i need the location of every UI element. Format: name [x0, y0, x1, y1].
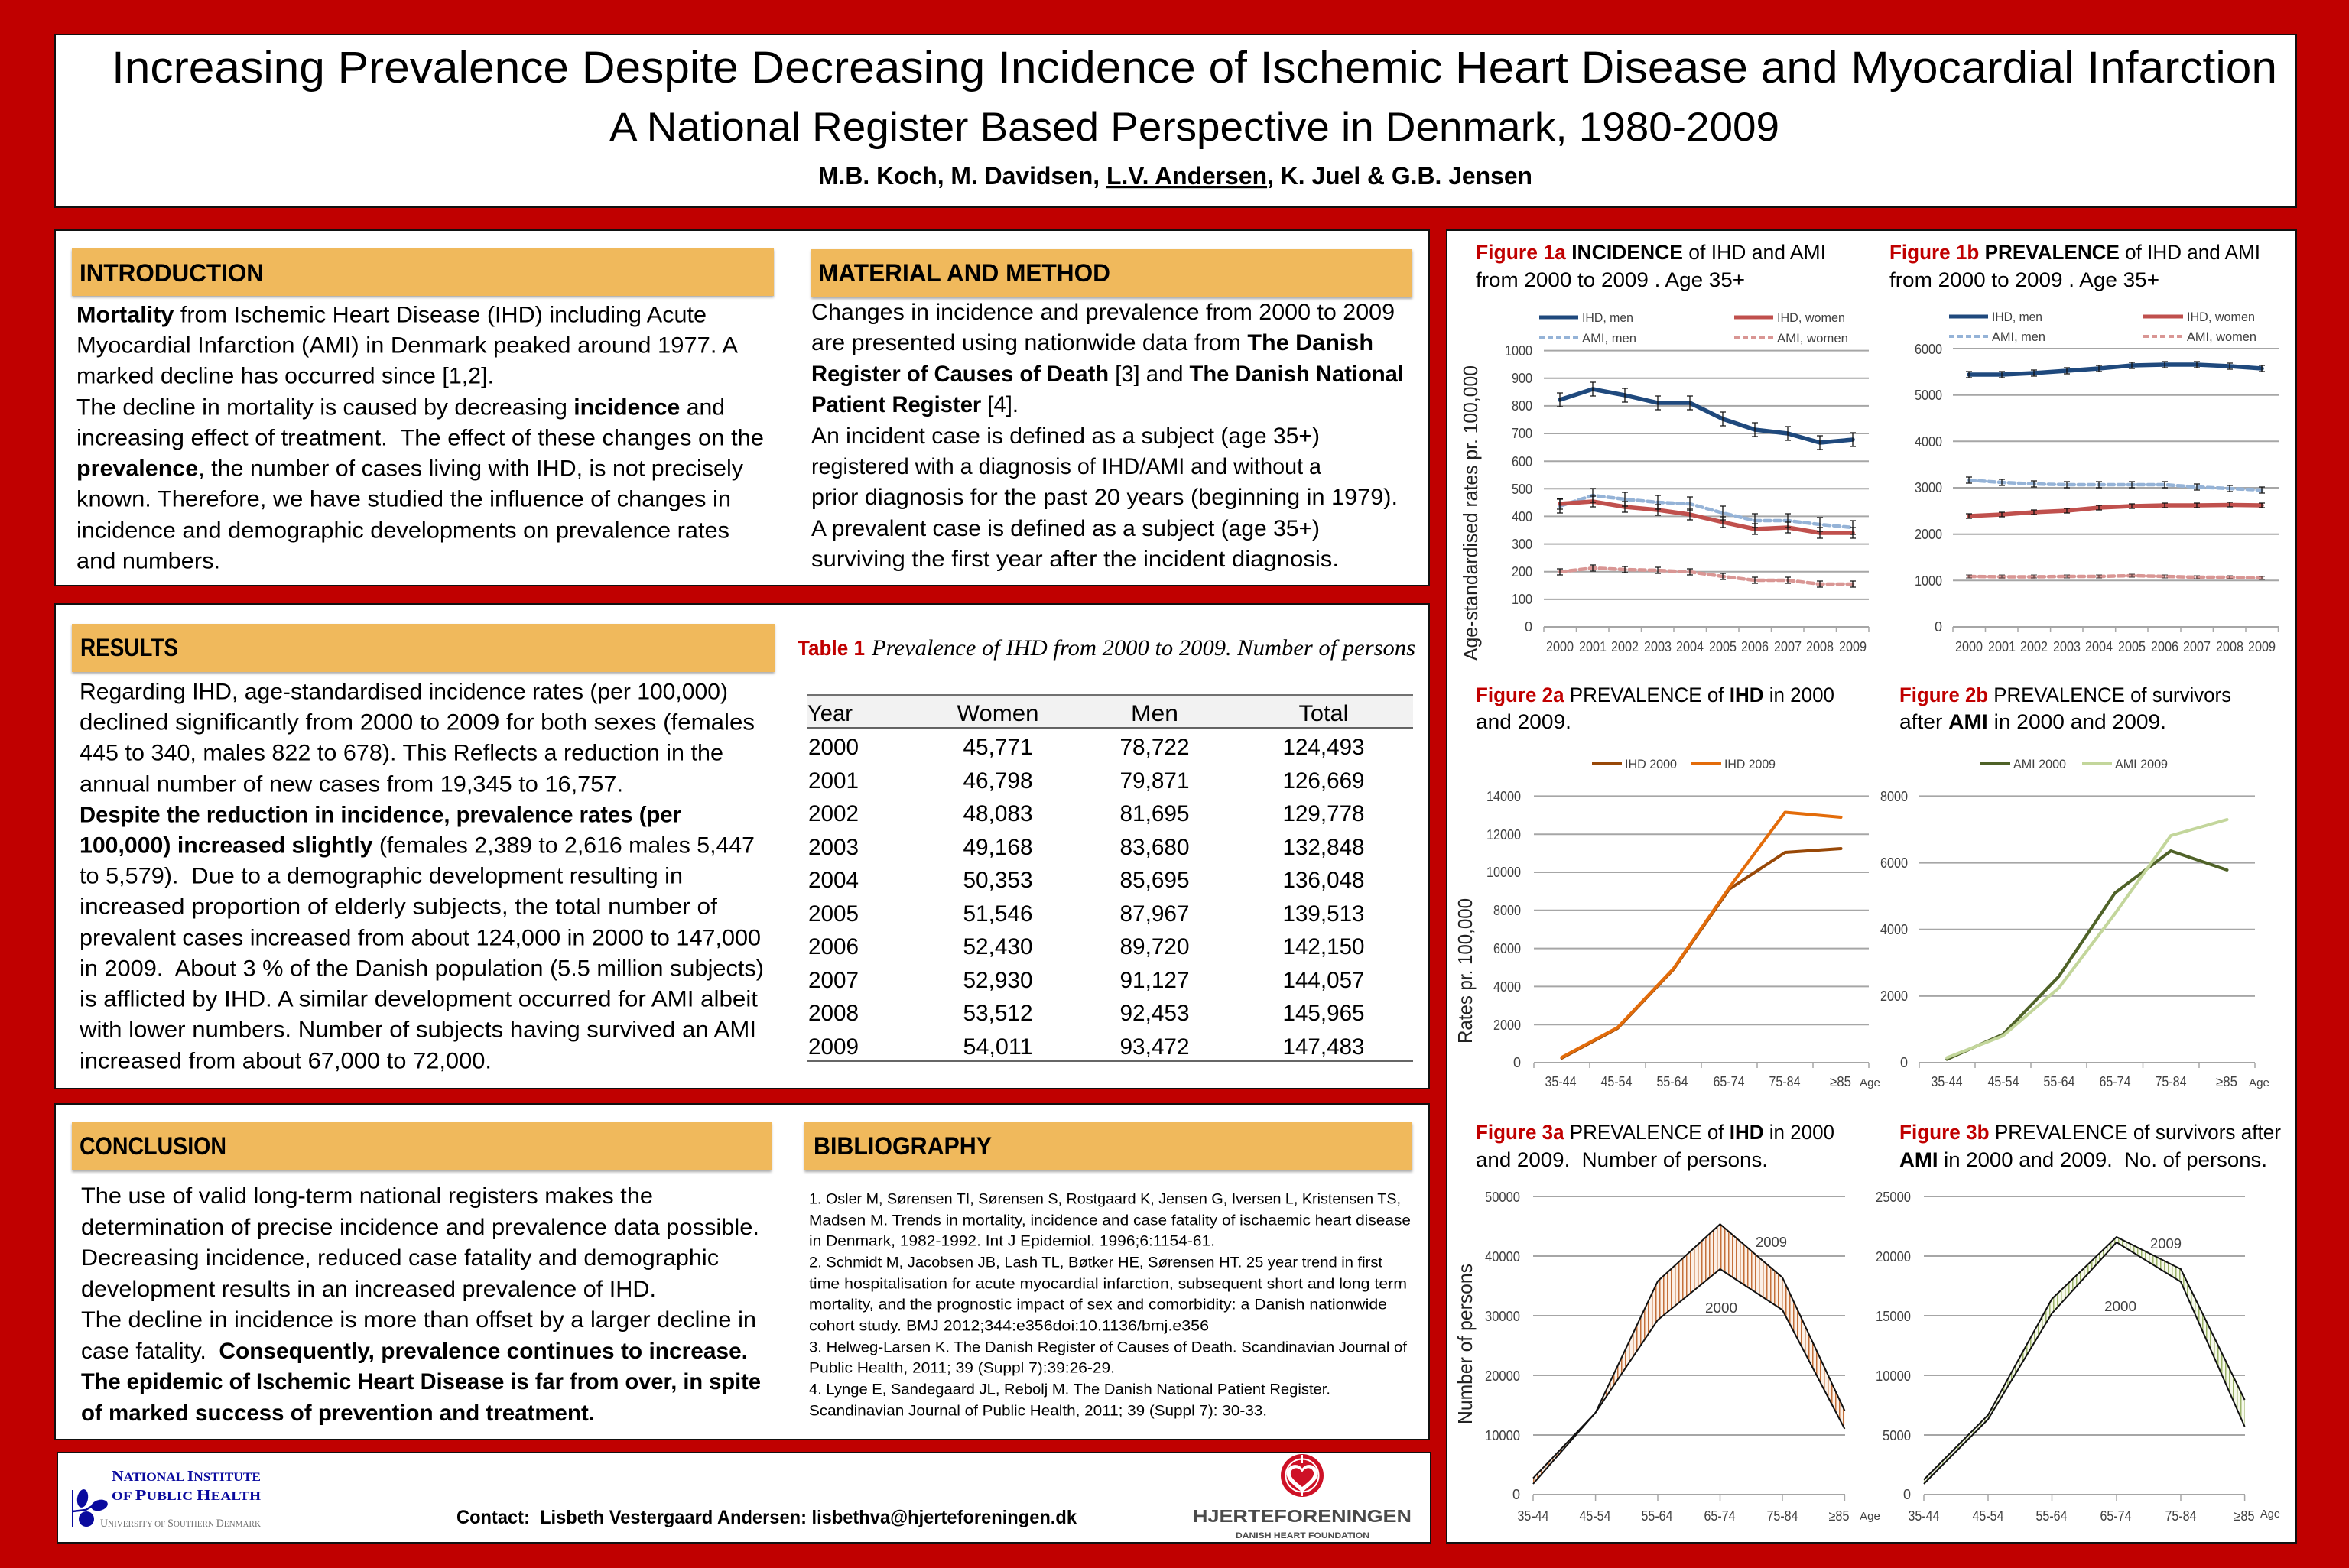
table: prevalence numbers: 53,512	[963, 1001, 1032, 1026]
chart: figure 2a prevalence by age: 4000	[1493, 979, 1521, 995]
table: prevalence numbers: 2000	[808, 735, 859, 760]
table: prevalence numbers: 2007	[808, 968, 859, 993]
chart: figure 1a incidence line chart: 2003	[1644, 639, 1672, 654]
chart: figure 1a incidence line chart: 900	[1512, 371, 1532, 386]
text block: material and method: An incident case is defined as a subject (age 35+)	[811, 424, 1320, 449]
text block: results: increased from about 67,000 to 72,000.	[80, 1049, 492, 1073]
text block: introduction: prevalence, the number of cases living with IHD, is not precisely	[76, 456, 743, 482]
chart: figure 1b prevalence line chart: 2001	[1988, 639, 2016, 654]
text block: introduction: marked decline has occurred since [1,2].	[76, 364, 494, 388]
chart: figure 3a number of persons band: 20000	[1485, 1368, 1520, 1384]
text block: results: with lower numbers. Number of subjects having survived an AMI	[79, 1017, 756, 1043]
text block: material and method: A prevalent case is defined as a subject (age 35+)	[811, 516, 1320, 541]
legend 2b: AMI 2009	[2115, 757, 2168, 771]
chart: figure 3a number of persons band: 40000	[1485, 1249, 1520, 1264]
chart: figure 3b number of survivors band: Age	[2260, 1508, 2280, 1521]
text block: conclusion: determination of precise incidence and prevalence data possible.	[81, 1215, 759, 1240]
chart: figure 3a number of persons band: 75-84	[1766, 1508, 1798, 1524]
chart: figure 1b prevalence line chart: 2000	[1955, 639, 1983, 654]
chart: figure 3b number of survivors band: ≥85	[2234, 1508, 2254, 1524]
chart: figure 2a prevalence by age: 65-74	[1713, 1074, 1745, 1089]
chart: figure 1b prevalence line chart: 2008	[2216, 639, 2243, 654]
heading: material and method: MATERIAL AND METHOD	[818, 259, 1110, 287]
legend 2a: IHD 2000	[1625, 757, 1677, 771]
table: prevalence numbers: 2003	[808, 835, 859, 860]
text block: results: to 5,579). Due to a demographic development resulting in	[80, 864, 683, 888]
table: prevalence numbers: 136,048	[1283, 868, 1364, 893]
figure 1b heading: Figure 1b PREVALENCE of IHD and AMI	[1889, 241, 2260, 264]
table: prevalence numbers: 52,430	[963, 934, 1032, 959]
figure 3a heading: Figure 3a PREVALENCE of IHD in 2000	[1476, 1121, 1834, 1144]
title panel	[55, 34, 2296, 207]
table: prevalence numbers: 92,453	[1119, 1001, 1190, 1026]
heading: conclusion	[72, 1122, 772, 1170]
text block: bibliography: mortality, and the prognostic impact of sex and comorbidity: a Danish nationwide	[809, 1297, 1387, 1313]
chart: figure 1a incidence line chart: 1000	[1505, 343, 1532, 359]
figure 3b heading: Figure 3b PREVALENCE of survivors after	[1899, 1121, 2281, 1144]
chart: figure 1a incidence line chart: 2004	[1676, 639, 1704, 654]
figure 1a heading: Figure 1a INCIDENCE of IHD and AMI	[1476, 241, 1826, 264]
logo: national institute of public health: UNIVERSITY OF SOUTHERN DENMARK	[100, 1518, 261, 1530]
table: prevalence numbers: 81,695	[1119, 801, 1190, 826]
text block: results: increased proportion of elderly subjects, the total number of	[80, 894, 718, 919]
text block: conclusion: The epidemic of Ischemic Heart Disease is far from over, in spite	[81, 1369, 761, 1394]
panel: figures	[1447, 230, 2296, 1543]
text block: introduction: Mortality from Ischemic Heart Disease (IHD) including Acute	[76, 303, 707, 327]
figure 2a heading	[1476, 683, 1834, 733]
text block: results	[79, 679, 764, 1073]
chart: figure 1b prevalence line chart: 4000	[1915, 434, 1942, 450]
chart: figure 2b survivors by age: 35-44	[1932, 1074, 1962, 1089]
chart: figure 2b survivors by age: 45-54	[1988, 1074, 2019, 1089]
table: prevalence numbers: 129,778	[1283, 801, 1364, 826]
chart: figure 2b survivors by age: 75-84	[2155, 1074, 2187, 1089]
chart: figure 2b survivors by age: 55-64	[2043, 1074, 2075, 1089]
chart: figure 2a prevalence by age	[1486, 757, 1880, 1089]
legend 2b: AMI 2000	[2013, 757, 2066, 771]
text block: conclusion: Decreasing incidence, reduced case fatality and demographic	[81, 1245, 719, 1271]
table: prevalence numbers: 144,057	[1283, 968, 1364, 993]
table: prevalence numbers: 48,083	[963, 801, 1032, 826]
chart: figure 2b survivors by age: 2000	[1880, 989, 1908, 1004]
text block: introduction: Myocardial Infarction (AMI) in Denmark peaked around 1977. A	[76, 333, 738, 358]
chart: figure 1a incidence line chart: 700	[1512, 426, 1532, 441]
table: prevalence numbers: Women	[957, 701, 1038, 726]
panel: conclusion and bibliography	[55, 1104, 1429, 1440]
text block: conclusion: of marked success of prevention and treatment.	[81, 1401, 595, 1426]
text block: bibliography: Public Health, 2011; 39 (Suppl 7):39:26-29.	[809, 1361, 1115, 1376]
table: prevalence numbers: 2008	[808, 1001, 859, 1026]
text block: introduction: increasing effect of treatment. The effect of these changes on the	[76, 425, 764, 451]
table: prevalence numbers: 89,720	[1119, 934, 1190, 959]
text block: bibliography: in Denmark, 1982-1992. Int J Epidemiol. 1996;6:1154-61.	[809, 1234, 1215, 1249]
table: prevalence numbers: 93,472	[1119, 1034, 1190, 1060]
subtitle: A National Register Based Perspective in Denmark, 1980-2009	[609, 105, 1779, 150]
table: prevalence numbers: 46,798	[963, 768, 1032, 794]
chart: figure 3a number of persons band: ≥85	[1829, 1508, 1849, 1524]
table: prevalence numbers: 124,493	[1283, 735, 1364, 760]
table: prevalence numbers: Men	[1131, 701, 1178, 726]
logo: national institute of public health: OF PUBLIC HEALTH	[112, 1487, 262, 1504]
chart: figure 1b prevalence line chart: 0	[1935, 619, 1942, 635]
chart: figure 3b number of survivors band: 0	[1903, 1487, 1911, 1502]
legend 1a	[1539, 310, 1848, 346]
chart: figure 3b number of survivors band: 5000	[1883, 1428, 1911, 1443]
chart: figure 3b number of survivors band: 75-84	[2165, 1508, 2196, 1524]
chart: figure 1b prevalence line chart	[1915, 310, 2279, 654]
text block: material and method: Register of Causes of Death [3] and The Danish National	[811, 362, 1404, 387]
text block: material and method: are presented using nationwide data from The Danish	[811, 330, 1373, 355]
text block: results: 445 to 340, males 822 to 678). This Reflects a reduction in the	[80, 740, 723, 766]
text block: bibliography: 3. Helweg-Larsen K. The Danish Register of Causes of Death. Scandinavian Journal of	[809, 1339, 1408, 1356]
chart: figure 3a number of persons band: 45-54	[1580, 1508, 1610, 1524]
logo: hjerteforeningen: DANISH HEART FOUNDATION	[1236, 1531, 1369, 1540]
text block: bibliography: 2. Schmidt M, Jacobsen JB, Lash TL, Bøtker HE, Sørensen HT. 25 year trend in first	[809, 1255, 1383, 1271]
chart: figure 1a incidence line chart	[1505, 310, 1869, 654]
text block: results: 100,000) increased slightly (females 2,389 to 2,616 males 5,447	[80, 833, 755, 858]
text block: introduction: incidence and demographic developments on prevalence rates	[76, 518, 729, 543]
text block: material and method: Patient Register [4].	[811, 392, 1019, 417]
chart: figure 3a number of persons band	[1485, 1190, 1880, 1524]
table: prevalence numbers: 50,353	[963, 868, 1032, 893]
legend 1a: AMI, men	[1582, 331, 1636, 346]
figure 1a heading: from 2000 to 2009 . Age 35+	[1476, 268, 1745, 291]
text block: bibliography: Madsen M. Trends in mortality, incidence and case fatality of ischaemic heart disease	[809, 1213, 1411, 1229]
figure 3b heading: AMI in 2000 and 2009. No. of persons.	[1899, 1148, 2267, 1171]
legend 1b	[1949, 310, 2256, 344]
table: prevalence numbers: 2004	[808, 868, 859, 893]
y axis title: age-standardised rates: Age-standardised rates pr. 100,000	[1459, 365, 1482, 661]
chart: figure 1a incidence line chart: 2006	[1741, 639, 1769, 654]
text block: conclusion: The decline in incidence is more than offset by a larger decline in	[81, 1307, 756, 1333]
legend 1b: IHD, women	[2187, 310, 2255, 324]
chart: figure 3a number of persons band: 2000	[1705, 1300, 1737, 1316]
table: prevalence numbers: 85,695	[1119, 868, 1190, 893]
chart: figure 2a prevalence by age: 55-64	[1656, 1074, 1688, 1089]
table: prevalence numbers	[807, 695, 1413, 1061]
chart: figure 1b prevalence line chart: 2007	[2183, 639, 2211, 654]
logo: hjerteforeningen	[1193, 1454, 1412, 1540]
chart: figure 1b prevalence line chart: 2002	[2020, 639, 2048, 654]
chart: figure 1a incidence line chart: 2005	[1709, 639, 1737, 654]
chart: figure 2b survivors by age: 6000	[1880, 855, 1908, 871]
chart: figure 2a prevalence by age: 2000	[1493, 1018, 1521, 1033]
figure 1a heading	[1476, 241, 1826, 291]
heading: results: RESULTS	[80, 634, 178, 661]
chart: figure 2a prevalence by age: 12000	[1486, 827, 1521, 842]
chart: figure 3b number of survivors band: 25000	[1876, 1190, 1911, 1205]
table: prevalence numbers: 145,965	[1283, 1001, 1364, 1026]
text block: results: in 2009. About 3 % of the Danish population (5.5 million subjects)	[80, 956, 764, 982]
heading: introduction: INTRODUCTION	[80, 259, 264, 287]
table: prevalence numbers: Year	[807, 701, 853, 726]
heading: material and method	[811, 249, 1412, 297]
text block: conclusion: The use of valid long-term national registers makes the	[81, 1183, 653, 1209]
text block: bibliography: cohort study. BMJ 2012;344:e356doi:10.1136/bmj.e356	[809, 1318, 1209, 1335]
text block: bibliography: 4. Lynge E, Sandegaard JL, Rebolj M. The Danish National Patient Register.	[809, 1382, 1330, 1398]
chart: figure 1b prevalence line chart: 1000	[1915, 573, 1942, 589]
chart: figure 1b prevalence line chart: 2009	[2248, 639, 2276, 654]
contact line: Contact: Lisbeth Vestergaard Andersen: lisbethva@hjerteforeningen.dk	[456, 1507, 1077, 1528]
chart: figure 3a number of persons band: Age	[1860, 1510, 1880, 1523]
table: prevalence numbers: 54,011	[963, 1034, 1032, 1060]
text block: material and method: prior diagnosis for the past 20 years (beginning in 1979).	[811, 485, 1398, 510]
table: prevalence numbers: 2001	[808, 768, 859, 794]
table: prevalence numbers: 2009	[808, 1034, 859, 1060]
chart: figure 2b survivors by age: Age	[2249, 1076, 2269, 1089]
chart: figure 1a incidence line chart: 600	[1512, 454, 1532, 469]
chart: figure 2a prevalence by age: ≥85	[1830, 1074, 1851, 1089]
legend 1a: AMI, women	[1777, 331, 1848, 346]
chart: figure 1b prevalence line chart: 6000	[1915, 342, 1942, 357]
legend 2b	[1980, 757, 2168, 771]
table: prevalence numbers: 147,483	[1283, 1034, 1364, 1060]
chart: figure 1a incidence line chart: 200	[1512, 564, 1532, 579]
chart: figure 2a prevalence by age: 0	[1513, 1055, 1521, 1070]
figure 2b heading	[1899, 683, 2231, 733]
chart: figure 3b number of survivors band: 10000	[1876, 1368, 1911, 1384]
table: prevalence numbers: 139,513	[1283, 901, 1364, 927]
text block: material and method: Changes in incidence and prevalence from 2000 to 2009	[811, 300, 1395, 325]
chart: figure 1a incidence line chart: 2000	[1546, 639, 1574, 654]
text block: bibliography: time hospitalisation for acute myocardial infarction, subsequent short and long term	[809, 1277, 1407, 1292]
table: prevalence numbers: 142,150	[1283, 934, 1364, 959]
chart: figure 1a incidence line chart: 100	[1512, 592, 1532, 607]
figure 1b heading	[1889, 241, 2260, 291]
chart: figure 1b prevalence line chart: 2000	[1915, 527, 1942, 542]
chart: figure 3a number of persons band: 35-44	[1517, 1508, 1549, 1524]
figure 3a heading	[1476, 1121, 1834, 1171]
text block: conclusion: development results in an increased prevalence of IHD.	[81, 1277, 656, 1302]
logo: national institute of public health	[73, 1468, 262, 1530]
text block: results: prevalent cases increased from about 124,000 in 2000 to 147,000	[80, 925, 761, 951]
chart: figure 1b prevalence line chart: 2005	[2118, 639, 2146, 654]
chart: figure 1a incidence line chart: 2007	[1774, 639, 1802, 654]
figure 2b heading: Figure 2b PREVALENCE of survivors	[1899, 683, 2231, 706]
chart: figure 2a prevalence by age: 35-44	[1545, 1074, 1577, 1089]
chart: figure 1b prevalence line chart: 3000	[1915, 480, 1942, 495]
chart: figure 3b number of survivors band: 20000	[1876, 1249, 1911, 1264]
chart: figure 1a incidence line chart: 400	[1512, 509, 1532, 524]
chart: figure 3a number of persons band: 65-74	[1704, 1508, 1736, 1524]
y axis title: number of persons: Number of persons	[1454, 1264, 1477, 1424]
table: prevalence numbers: 45,771	[963, 735, 1032, 760]
chart: figure 3a number of persons band: 0	[1512, 1487, 1520, 1502]
text block: introduction: known. Therefore, we have studied the influence of changes in	[76, 486, 731, 512]
chart: figure 3b number of survivors band: 55-64	[2035, 1508, 2068, 1524]
table: prevalence numbers: 126,669	[1283, 768, 1364, 794]
chart: figure 1a incidence line chart: 300	[1512, 537, 1532, 552]
text block: material and method: surviving the first year after the incident diagnosis.	[811, 547, 1339, 572]
chart: figure 3a number of persons band: 30000	[1485, 1309, 1520, 1324]
text block: conclusion	[81, 1183, 761, 1426]
table: prevalence numbers: 2002	[808, 801, 859, 826]
chart: figure 2a prevalence by age: 10000	[1486, 865, 1521, 880]
text block: results: annual number of new cases from 19,345 to 16,757.	[80, 772, 623, 797]
chart: figure 1a incidence line chart: 2002	[1611, 639, 1639, 654]
chart: figure 1b prevalence line chart: 2003	[2053, 639, 2081, 654]
figure 2b heading: after AMI in 2000 and 2009.	[1899, 710, 2166, 733]
chart: figure 3a number of persons band: 55-64	[1641, 1508, 1673, 1524]
text block: introduction	[76, 303, 764, 573]
legend 2a: IHD 2009	[1724, 757, 1776, 771]
chart: figure 2b survivors by age: ≥85	[2216, 1074, 2237, 1089]
heading: bibliography	[804, 1122, 1412, 1170]
heading: introduction	[72, 248, 774, 296]
chart: figure 1a incidence line chart: 800	[1512, 398, 1532, 414]
text block: results: declined significantly from 2000 to 2009 for both sexes (females	[80, 709, 755, 735]
text block: introduction: The decline in mortality is caused by decreasing incidence and	[76, 394, 725, 420]
chart: figure 3a number of persons band: 50000	[1485, 1190, 1520, 1205]
legend 1a: IHD, men	[1582, 310, 1633, 325]
table: prevalence numbers: 87,967	[1119, 901, 1190, 927]
legend 1a: IHD, women	[1777, 310, 1845, 325]
chart: figure 3b number of survivors band: 65-74	[2100, 1508, 2132, 1524]
legend 2a	[1592, 757, 1776, 771]
chart: figure 2a prevalence by age: Age	[1860, 1076, 1880, 1089]
chart: figure 1a incidence line chart: 2008	[1806, 639, 1834, 654]
figure 3a heading: and 2009. Number of persons.	[1476, 1148, 1768, 1171]
table: prevalence numbers: 78,722	[1119, 735, 1190, 760]
chart: figure 1b prevalence line chart: 2006	[2151, 639, 2178, 654]
chart: figure 1a incidence line chart: 2009	[1839, 639, 1867, 654]
logo: national institute of public health: NATIONAL INSTITUTE	[112, 1468, 261, 1485]
text block: material and method: registered with a diagnosis of IHD/AMI and without a	[811, 454, 1321, 479]
main title: Increasing Prevalence Despite Decreasing Incidence of Ischemic Heart Disease and Myocardial Infarction	[112, 43, 2277, 93]
chart: figure 3b number of survivors band: 2000	[2104, 1299, 2136, 1314]
chart: figure 2b survivors by age	[1880, 757, 2269, 1089]
authors: M.B. Koch, M. Davidsen, L.V. Andersen, K. Juel & G.B. Jensen	[818, 162, 1532, 190]
chart: figure 3b number of survivors band: 15000	[1876, 1309, 1911, 1324]
table caption: Table 1	[798, 636, 865, 660]
chart: figure 3b number of survivors band: 2009	[2150, 1236, 2182, 1251]
panel: introduction and method	[55, 230, 1429, 586]
text block: material and method	[811, 300, 1404, 572]
legend 1b: IHD, men	[1992, 310, 2042, 324]
chart: figure 2a prevalence by age: 8000	[1493, 903, 1521, 918]
chart: figure 2a prevalence by age: 45-54	[1601, 1074, 1632, 1089]
table: prevalence numbers: 132,848	[1283, 835, 1364, 860]
chart: figure 3b number of survivors band	[1876, 1190, 2280, 1524]
chart: figure 1a incidence line chart: 500	[1512, 482, 1532, 497]
chart: figure 2a prevalence by age: 6000	[1493, 941, 1521, 956]
logo: hjerteforeningen: HJERTEFORENINGEN	[1193, 1506, 1412, 1526]
y axis title: rates: Rates pr. 100,000	[1454, 898, 1477, 1044]
panel: footer	[57, 1453, 1431, 1543]
chart: figure 3a number of persons band: 2009	[1756, 1235, 1787, 1250]
table: prevalence numbers: Total	[1298, 701, 1349, 726]
table: prevalence numbers: 83,680	[1119, 835, 1190, 860]
chart: figure 3b number of survivors band: 35-44	[1909, 1508, 1939, 1524]
chart: figure 1a incidence line chart: 2001	[1579, 639, 1607, 654]
chart: figure 2b survivors by age: 4000	[1880, 922, 1908, 937]
text block: bibliography: 1. Osler M, Sørensen TI, Sørensen S, Rostgaard K, Jensen G, Iversen L, Kristensen TS,	[809, 1191, 1401, 1208]
chart: figure 2a prevalence by age: 14000	[1486, 789, 1521, 804]
table: prevalence numbers: 2006	[808, 934, 859, 959]
text block: results: Despite the reduction in incidence, prevalence rates (per	[80, 803, 681, 827]
chart: figure 2a prevalence by age: 75-84	[1769, 1074, 1800, 1089]
legend 1b: AMI, men	[1992, 330, 2045, 344]
table: prevalence numbers: 49,168	[963, 835, 1032, 860]
chart: figure 1a incidence line chart: 0	[1525, 619, 1532, 635]
text block: bibliography	[809, 1191, 1411, 1419]
chart: figure 2b survivors by age: 65-74	[2100, 1074, 2130, 1089]
table: prevalence numbers: 52,930	[963, 968, 1032, 993]
legend 1b: AMI, women	[2187, 330, 2256, 344]
text block: introduction: and numbers.	[76, 549, 220, 573]
chart: figure 1b prevalence line chart: 5000	[1915, 388, 1942, 403]
figure 1b heading: from 2000 to 2009 . Age 35+	[1889, 268, 2159, 291]
text block: results: is afflicted by IHD. A similar development occurred for AMI albeit	[80, 986, 759, 1012]
text block: bibliography: Scandinavian Journal of Public Health, 2011; 39 (Suppl 7): 30-33.	[809, 1404, 1267, 1419]
table: prevalence numbers: 51,546	[963, 901, 1032, 927]
text block: conclusion: case fatality. Consequently, prevalence continues to increase.	[81, 1339, 748, 1364]
figure 3b heading	[1899, 1121, 2281, 1171]
figure 2a heading: and 2009.	[1476, 710, 1571, 733]
table: prevalence numbers: 2005	[808, 901, 859, 927]
chart: figure 3a number of persons band: 10000	[1485, 1428, 1520, 1443]
figure 2a heading: Figure 2a PREVALENCE of IHD in 2000	[1476, 683, 1834, 706]
chart: figure 2b survivors by age: 8000	[1880, 789, 1908, 804]
panel: results	[55, 604, 1429, 1089]
table: prevalence numbers: 91,127	[1119, 968, 1190, 993]
heading: bibliography: BIBLIOGRAPHY	[814, 1132, 992, 1160]
heading: results	[72, 624, 775, 672]
chart: figure 2b survivors by age: 0	[1900, 1055, 1908, 1070]
chart: figure 1b prevalence line chart: 2004	[2085, 639, 2113, 654]
heading: conclusion: CONCLUSION	[80, 1132, 226, 1160]
table caption: Prevalence of IHD from 2000 to 2009. Number of persons	[871, 635, 1415, 661]
chart: figure 3b number of survivors band: 45-54	[1973, 1508, 2003, 1524]
table: prevalence numbers: 79,871	[1119, 768, 1190, 794]
text block: results: Regarding IHD, age-standardised incidence rates (per 100,000)	[80, 679, 728, 705]
